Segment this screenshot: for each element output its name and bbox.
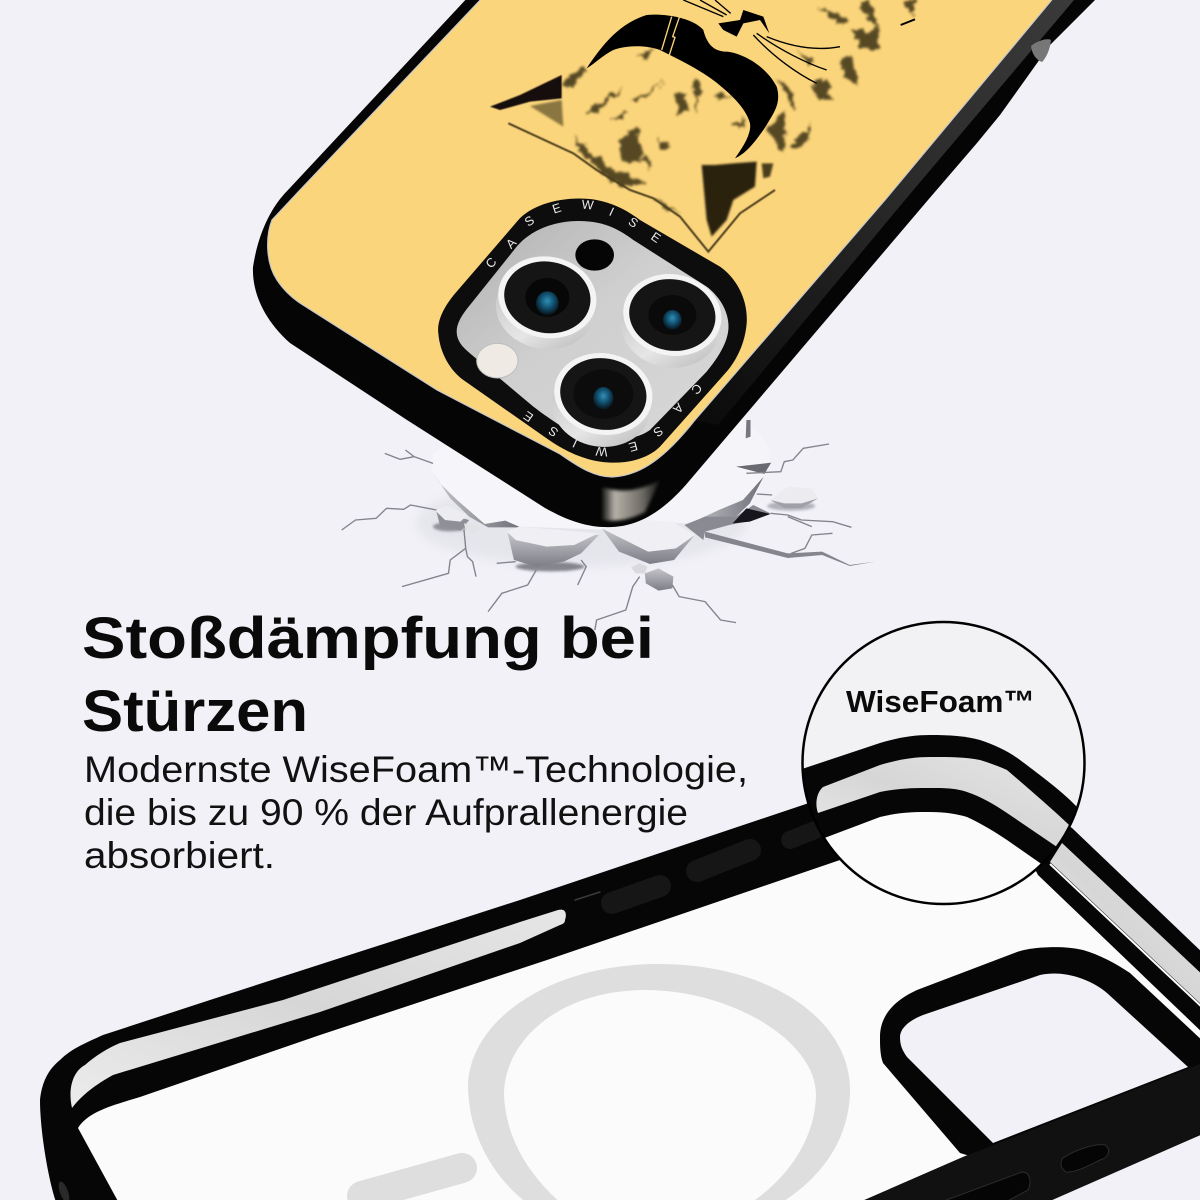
rock chunk right xyxy=(767,487,818,511)
brand ring text xyxy=(483,198,705,459)
cracked wall impact xyxy=(342,420,876,630)
heading: Stoßdämpfung bei xyxy=(82,606,654,671)
ear shade xyxy=(530,100,563,127)
side button highlight xyxy=(1031,39,1051,62)
brand ring text: W xyxy=(581,198,594,212)
whiskers xyxy=(683,0,915,83)
flash xyxy=(477,343,518,378)
dark gap xyxy=(684,505,770,540)
camera cutout frame xyxy=(880,947,1200,1160)
crack lines xyxy=(342,444,851,630)
heading: Stürzen xyxy=(82,679,308,744)
corner glare xyxy=(602,480,660,521)
heading xyxy=(82,606,654,744)
magnifier ring xyxy=(802,622,1084,904)
magsafe ring xyxy=(468,964,850,1200)
brand ring text: E xyxy=(648,229,663,246)
left ear xyxy=(490,75,562,110)
brand ring text: S xyxy=(546,423,561,440)
frame outer silhouette xyxy=(40,780,1200,1200)
side buttons xyxy=(575,830,815,903)
lens 1 xyxy=(489,249,603,357)
magnifier callout xyxy=(801,620,1086,906)
brand ring text: C xyxy=(483,255,500,271)
body text xyxy=(84,749,748,876)
camera island xyxy=(438,198,747,463)
pill mark xyxy=(362,1168,462,1196)
magnifier label: WiseFoam™ xyxy=(846,684,1035,719)
clear case with black frame xyxy=(40,780,1200,1200)
silver plate xyxy=(457,221,729,441)
broken plate left xyxy=(431,427,616,530)
case outer bumper xyxy=(253,0,1100,527)
magnified corner xyxy=(804,735,1076,902)
body outline xyxy=(508,123,775,252)
brand ring text: E xyxy=(521,408,536,425)
lightning stripe xyxy=(662,17,679,55)
body text: die bis zu 90 % der Aufprallenergie xyxy=(84,792,688,833)
paw shadow xyxy=(702,162,757,237)
left side hole xyxy=(56,1180,72,1200)
brand ring text: I xyxy=(607,205,616,219)
brand ring text: S xyxy=(651,423,666,440)
lens 2 xyxy=(614,266,728,375)
wedge crack xyxy=(705,532,876,566)
brand ring text: A xyxy=(670,400,686,416)
clear interior xyxy=(78,820,1200,1200)
foam slot left xyxy=(71,910,566,1108)
slot edge highlight xyxy=(1050,864,1200,1010)
microphone xyxy=(575,239,614,271)
rock chunk centre right xyxy=(602,520,695,591)
camera bumper xyxy=(438,199,747,463)
brand ring text: C xyxy=(688,381,705,397)
brand ring text: E xyxy=(551,201,563,217)
body text: absorbiert. xyxy=(84,835,275,876)
headband xyxy=(587,15,778,158)
illustration: cat with headband xyxy=(490,0,917,252)
brand ring text: A xyxy=(503,235,520,252)
yellow back panel xyxy=(268,0,1056,477)
lens 3 xyxy=(545,345,659,455)
phone case with yellow back xyxy=(253,0,1100,527)
brand ring text: E xyxy=(627,438,639,454)
camera cutout xyxy=(900,974,1188,1143)
rock chunk centre left xyxy=(507,527,599,571)
rock chunk left xyxy=(433,506,479,534)
brand ring text: S xyxy=(522,213,537,229)
brand ring text: W xyxy=(595,444,608,459)
brand ring text: S xyxy=(626,214,641,231)
broken plate right xyxy=(643,420,771,526)
nose xyxy=(718,10,769,37)
case bottom edge xyxy=(853,1062,1200,1200)
foam slot right xyxy=(1050,843,1200,1008)
fur smudges xyxy=(563,0,917,213)
background corner xyxy=(1050,1133,1200,1200)
body text: Modernste WiseFoam™-Technologie, xyxy=(84,749,748,790)
side rim xyxy=(695,0,1074,425)
brand ring text: I xyxy=(571,436,580,450)
